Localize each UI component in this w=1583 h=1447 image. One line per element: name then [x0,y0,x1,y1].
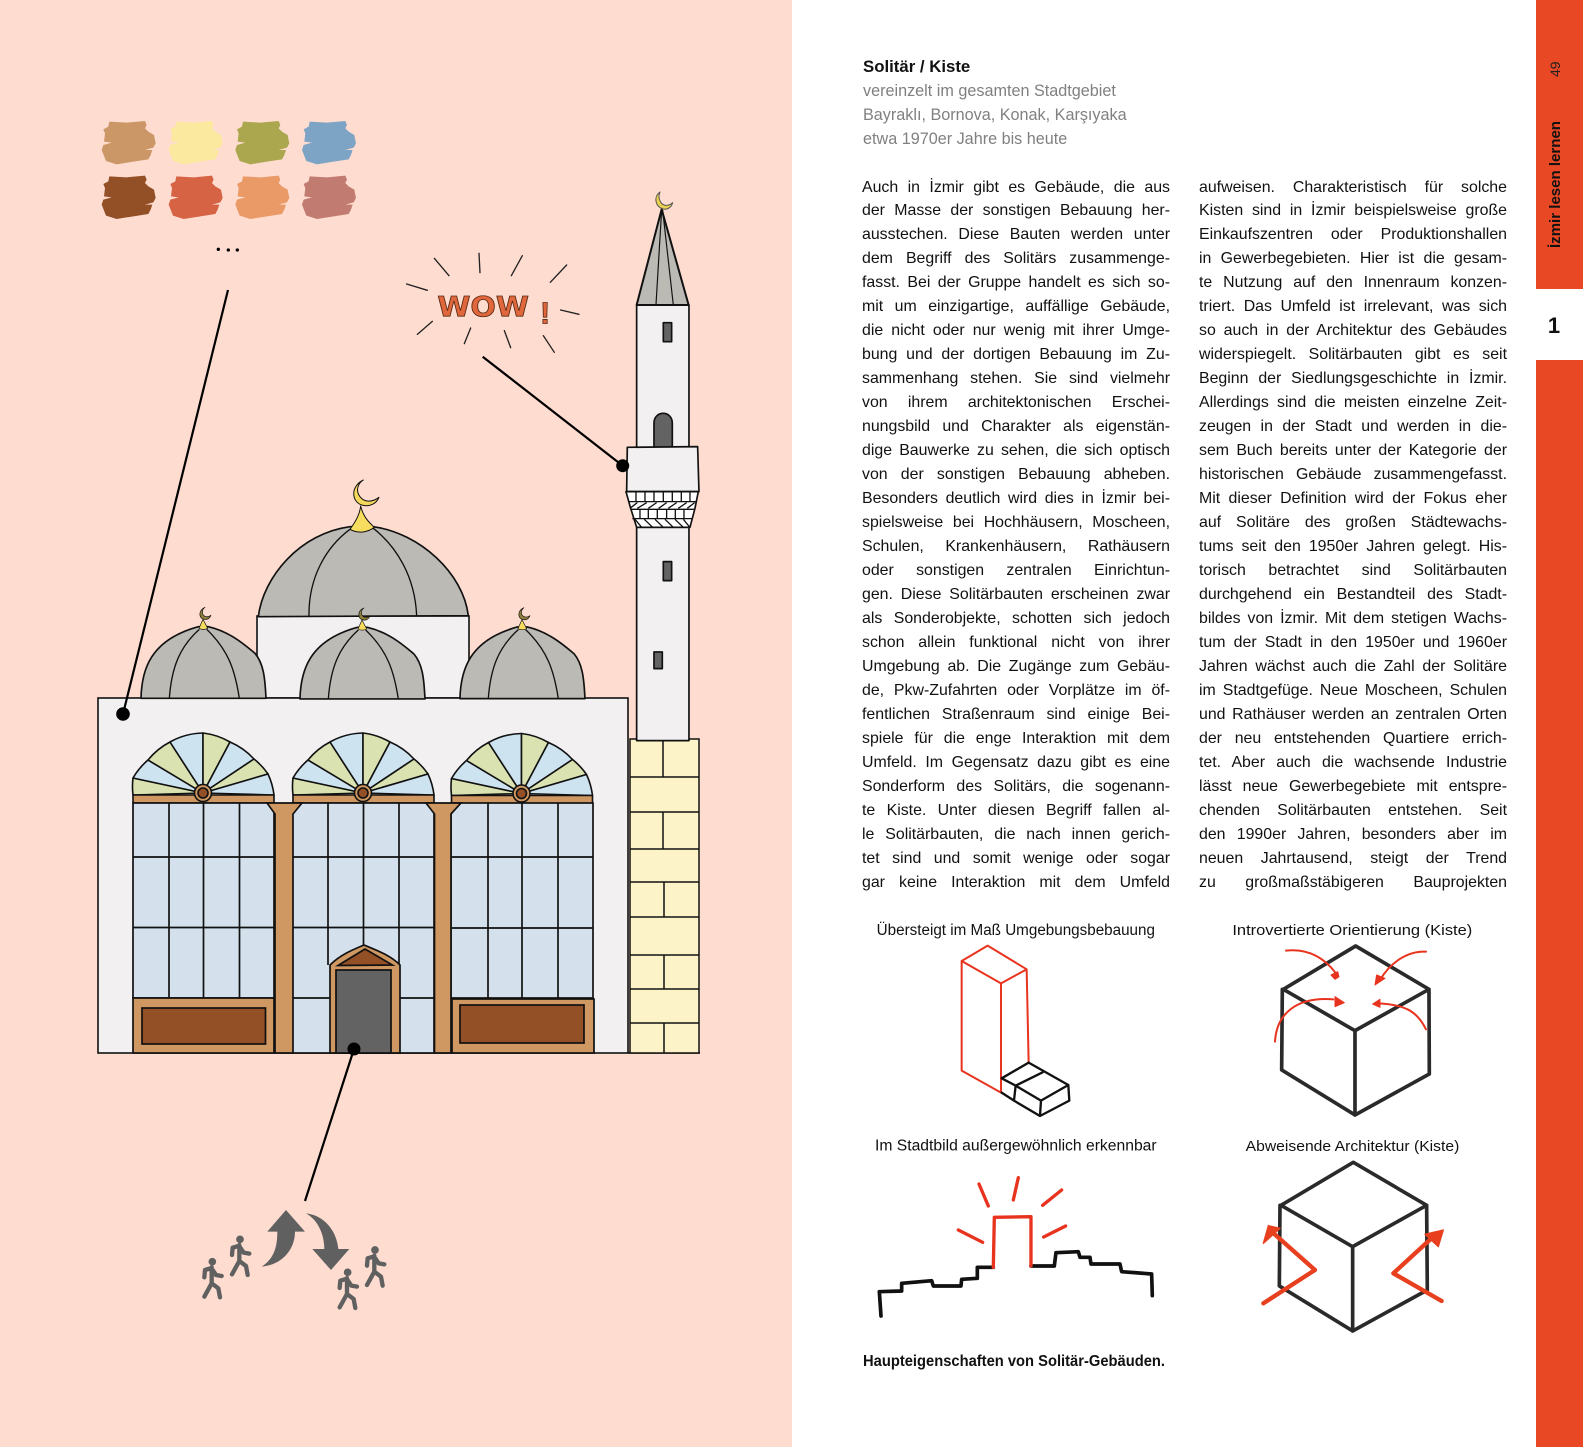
text block: column two: lässt neue Gewerbegebiete mit entspre- [1199,778,1507,795]
text block: column one: ausstechen. Diese Bauten werden unter [862,226,1170,243]
text block: column two: aufweisen. Charakteristisch für solche [1199,178,1507,196]
right glazing [451,803,593,998]
icon: down arrow [306,1213,349,1270]
text block: column two: tums seit den 1950er Jahren gelegt. His- [1199,538,1507,555]
text block: column two: bildes von İzmir. Mit dem stetigen Wachs- [1199,610,1507,627]
minaret muqarnas [626,492,698,527]
base panel right [452,999,594,1053]
text block: column two: durchgehend ein Bestandteil des Stadt- [1199,586,1507,603]
text block: column two: tet. Aber auch die wachsende Industrie [1199,754,1507,771]
callout: wow exclamation [407,253,579,352]
sidebar: orange chapter bar: 49 [1547,61,1563,77]
text block: column one: te Kiste. Unter diesen Begriff fallen al- [862,802,1170,819]
text block: column two: in Gewerbegebieten. Hier ist die gesam- [1199,250,1507,267]
text block: column two: und Rathäuser werden an zentralen Orten [1199,706,1507,723]
text block: column one: oder sonstigen zentralen Einrichtun- [862,562,1170,579]
text block: column one: Auch in İzmir gibt es Gebäude, die aus [862,178,1170,196]
tan pillars [267,803,461,1053]
text block: column one: de, Pkw-Zufahrten oder Vorplätze im öf- [862,682,1170,699]
text block: column one: Besonders deutlich wird dies in İzmir bei- [862,490,1170,507]
text block: column one: spiele für die enge Interaktion mit dem [862,730,1170,747]
diagram: exceptional in cityscape [875,1138,1157,1316]
text block: column one: fasst. Bei der Gruppe handelt es sich so- [862,274,1170,291]
text block: column two: Einkaufszentren oder Produktionshallen [1199,226,1507,243]
mosque door [330,945,400,1053]
mosque domes [141,480,585,699]
text block: column one: fentlichen Straßenraum sind einige Bei- [862,706,1170,723]
heading block [863,57,1127,148]
text block: column two: historischen Gebäude zusammengefasst. [1199,466,1507,483]
minaret balcony [627,447,699,492]
title: Solitär / Kiste [863,57,970,76]
text block: column two: der neu entstehenden Quartiere errich- [1199,730,1507,747]
diagram: repellent architecture: Abweisende Architektur (Kiste) [1246,1138,1459,1155]
icon: small dome left [141,607,266,698]
icon: large dome [258,480,468,617]
figure caption: Haupteigenschaften von Solitär-Gebäuden. [863,1353,1165,1370]
text block: column two: chenden Solitärbauten entstehen. Seit [1199,802,1507,819]
text block: column two: widerspiegelt. Solitärbauten gibt es seit [1199,346,1507,363]
text block: column one: spielsweise bei Hochhäusern, Moscheen, [862,514,1170,531]
icon: up arrow [262,1210,305,1267]
text block: column two: sem Buch bereits unter der Kategorie der [1199,442,1507,459]
panel: left illustration background [0,0,792,1447]
leader line: colours to wall [116,290,228,721]
minaret windows [654,323,672,669]
text block: column one: die nicht oder nur wenig mit ihrer Umge- [862,322,1170,339]
text block: column one [862,178,1170,891]
text block: column one: gen. Diese Solitärbauten erscheinen zwar [862,586,1170,603]
text block: column two: Beginn der Siedlungsgeschichte in İzmir. [1199,370,1507,387]
text block: column one: nungsbild und Charakter als eigenstän- [862,418,1170,435]
colour swatches [102,121,356,252]
text block: column two: torisch betrachtet sind Solitärbauten [1199,562,1507,579]
text block: column two: tum der Stadt in den 1950er und 1960er [1199,634,1507,651]
icon: small dome centre [300,608,425,699]
text block: column one: schon allein funktional nicht von ihrer [862,634,1170,651]
sidebar: orange chapter bar [1536,0,1583,1447]
diagram: exceeds surrounding scale [877,921,1155,1116]
text block: column one: le Solitärbauten, die nach innen gerich- [862,826,1170,843]
icon: circulation arrows and walkers [204,1210,384,1308]
fan window centre [292,733,434,803]
text block: column two: zu großmaßstäbigeren Bauprojekten [1199,874,1507,891]
text block: column two: te Nutzung auf den Innenraum konzen- [1199,274,1507,291]
text block: column one: dige Bauwerke zu sehen, die sich optisch [862,442,1170,459]
diagram: repellent architecture [1246,1138,1459,1331]
icon: walker 1 [204,1260,222,1297]
text block: column two: den 1990er Jahren, besonders aber im [1199,826,1507,843]
text block: column one: mit um einzigartige, auffällige Gebäude, [862,298,1170,315]
text block: column one: von der sonstigen Bebauung abheben. [862,466,1170,483]
fan window right [451,734,592,804]
icon: walker 4 [367,1248,384,1286]
text block: column one: Umgebung ab. Die Zugänge zum Gebäu- [862,658,1170,675]
minaret spire [637,192,689,305]
text block: column one: von ihrem architektonischen Erschei- [862,394,1170,411]
text block: column two [1199,178,1507,891]
text block: column two: auf Solitäre des großen Städtewachs- [1199,514,1507,531]
left glazing [133,803,274,998]
text block: column one: gar keine Interaktion mit dem Umfeld [862,874,1170,891]
text block: column two: triert. Das Umfeld ist irrelevant, was sich [1199,298,1507,315]
text block: column one: Schulen, Krankenhäusern, Rathäusern [862,538,1170,555]
tower base stones [630,739,699,1053]
sidebar: orange chapter bar: 1 [1548,313,1560,338]
text block: column two: Mit dieser Definition wird der Fokus eher [1199,490,1507,507]
text block: column two: so auch in der Architektur des Gebäudes [1199,322,1507,339]
diagram: exceptional in cityscape: Im Stadtbild außergewöhnlich erkennbar [875,1138,1157,1155]
text block: column one: sammenhang stehen. Sie sind vielmehr [862,370,1170,387]
icon: walker 2 [232,1238,249,1275]
wow lettering: WOW [437,290,529,323]
text block: column one: dem Begriff des Solitärs zusammenge- [862,250,1170,267]
text block: column two: im Stadtgefüge. Neue Moscheen, Schulen [1199,682,1507,699]
diagram: introverted orientation: Introvertierte Orientierung (Kiste) [1232,923,1472,939]
diagram: exceeds surrounding scale: Übersteigt im Maß Umgebungsbebauung [877,921,1155,939]
icon: small dome right [460,608,585,699]
mosque main building wall and drum [98,616,700,1053]
text block: column one: tet sind und somit wenige oder sogar [862,850,1170,867]
diagram: introverted orientation [1232,923,1472,1115]
sidebar: orange chapter bar: İzmir lesen lernen [1547,121,1564,248]
location lines: etwa 1970er Jahre bis heute [863,130,1067,148]
text block: column one: als Sonderobjekte, schotten sich jedoch [862,610,1170,627]
minaret [626,192,699,741]
leader line: door to circulation [305,1042,360,1201]
fan window left [132,733,274,803]
text block: column two: zeugen in der Stadt und werden in die- [1199,418,1507,435]
location lines: vereinzelt im gesamten Stadtgebiet [863,82,1116,100]
icon: walker 3 [340,1271,357,1308]
text block: column one: bung und der dortigen Bebauung im Zu- [862,346,1170,363]
window grids and pillars [133,803,594,1053]
callout: wow exclamation: ! [540,296,550,330]
text block: column one: Umfeld. Im Gegensatz dazu gibt es eine [862,754,1170,771]
location lines [863,82,1127,148]
text block: column two: Kisten sind in İzmir beispielsweise große [1199,202,1507,219]
location lines: Bayraklı, Bornova, Konak, Karşıyaka [863,106,1127,124]
centre glazing [292,803,434,1053]
minaret shaft [637,305,689,447]
text block: column one: Sonderform des Solitärs, die sogenann- [862,778,1170,795]
text block: column two: Allerdings sind die meisten einzelne Zeit- [1199,394,1507,411]
text block: column one: der Masse der sonstigen Bebauung her- [862,202,1170,219]
wow rays [407,253,579,352]
text block: column two: Jahren wächst auch die Zahl der Solitäre [1199,658,1507,675]
leader line: wow to minaret [483,357,629,472]
text block: column two: neuen Jahrtausend, steigt der Trend [1199,850,1507,867]
base panel left [133,998,274,1053]
